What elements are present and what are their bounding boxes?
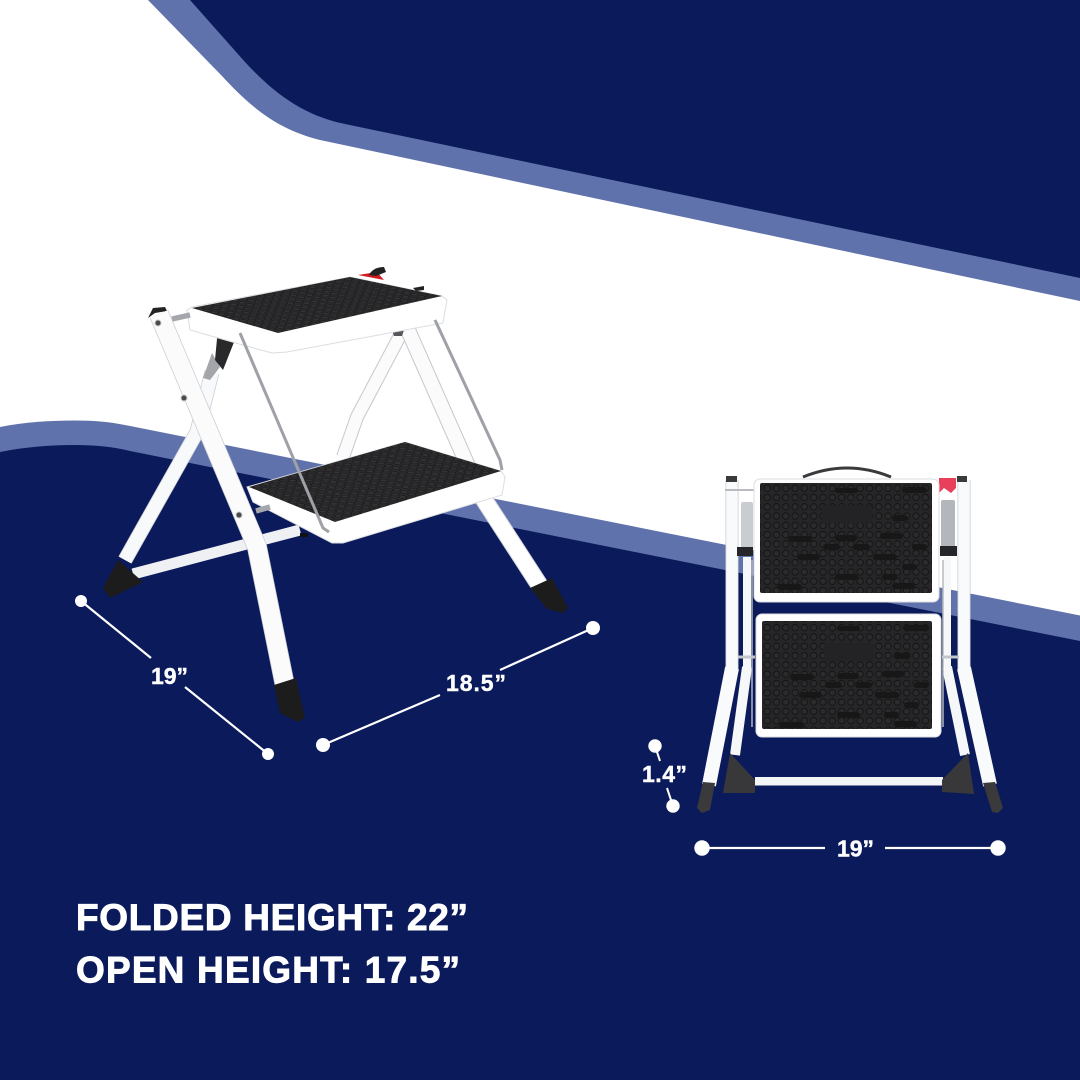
folded: right chrome hinge [941, 500, 955, 549]
dimension: width 18.5 in: 18.5” [446, 670, 506, 696]
stool: upper bracket [392, 327, 405, 336]
folded: top pins [725, 489, 755, 491]
dimension: folded depth 1.4 in: 1.4” [642, 761, 687, 787]
folded: crossbar [755, 777, 943, 786]
folded: lower tread body [756, 614, 941, 737]
folded: outer right leg [964, 480, 990, 785]
folded: lower tread rubber [762, 621, 932, 729]
folded step stool [697, 468, 1003, 813]
folded: left gusset [723, 753, 755, 793]
stool: pin [172, 315, 190, 319]
stool: back right legs [343, 330, 540, 586]
folded: wire frame [752, 560, 943, 727]
stool: bracket [413, 286, 424, 291]
folded: handle [803, 468, 891, 477]
stool: lower tread body [247, 442, 505, 543]
stool: right chrome rod [435, 320, 502, 470]
stool: front foot cap [274, 678, 305, 722]
dimension: folded width 19 in [694, 836, 1006, 862]
stool: small black stop [300, 533, 308, 537]
heading: folded height: FOLDED HEIGHT: 22” [76, 897, 468, 938]
folded: left foot [697, 782, 715, 813]
folded: inner legs [735, 557, 965, 755]
dimension: depth 19 in: 19” [151, 663, 188, 689]
folded: outer left leg [709, 480, 732, 785]
dimension: depth 19 in [75, 595, 274, 760]
folded: left clip [737, 547, 753, 556]
open step stool [103, 267, 568, 722]
stool: main front leg [155, 314, 285, 686]
dimension: folded width 19 in: 19” [837, 836, 874, 862]
stool: left chrome rod [240, 333, 329, 532]
folded: right foot [983, 782, 1003, 813]
folded: top tread rubber [760, 483, 932, 593]
dimension: width 18.5 in [316, 621, 600, 752]
folded: left cap [726, 476, 737, 482]
stool: red release latch [358, 272, 384, 280]
folded: left chrome hinge [741, 502, 753, 549]
stool: latch handle [369, 267, 386, 276]
stool: lower tread rubber [249, 442, 501, 522]
stool: rear left leg [125, 372, 212, 560]
dimension: folded depth 1.4 in [642, 739, 687, 813]
stool: black hinge [215, 325, 238, 370]
folded: right clip [940, 546, 957, 556]
folded: top tread body [754, 479, 939, 602]
heading: open height: OPEN HEIGHT: 17.5” [76, 950, 460, 990]
bottom panel: navy [0, 445, 1080, 1080]
stool: lower pin [256, 507, 270, 511]
stool: rear left foot cap [103, 560, 143, 598]
stool: right foot cap [530, 578, 568, 613]
stool: chrome hinge [203, 353, 220, 380]
folded: right cap [957, 476, 967, 482]
top panel: navy [190, 0, 1080, 278]
folded: red latch [939, 478, 956, 493]
stool: cross bar [133, 530, 300, 574]
stool: top tread body [187, 277, 447, 353]
top band: periwinkle [148, 0, 1080, 301]
bottom band: periwinkle [0, 420, 1080, 1080]
folded: right gusset [942, 753, 974, 794]
stool: left cap [148, 307, 167, 318]
folded: mid pins [738, 656, 959, 658]
stool: top tread rubber [192, 277, 442, 333]
